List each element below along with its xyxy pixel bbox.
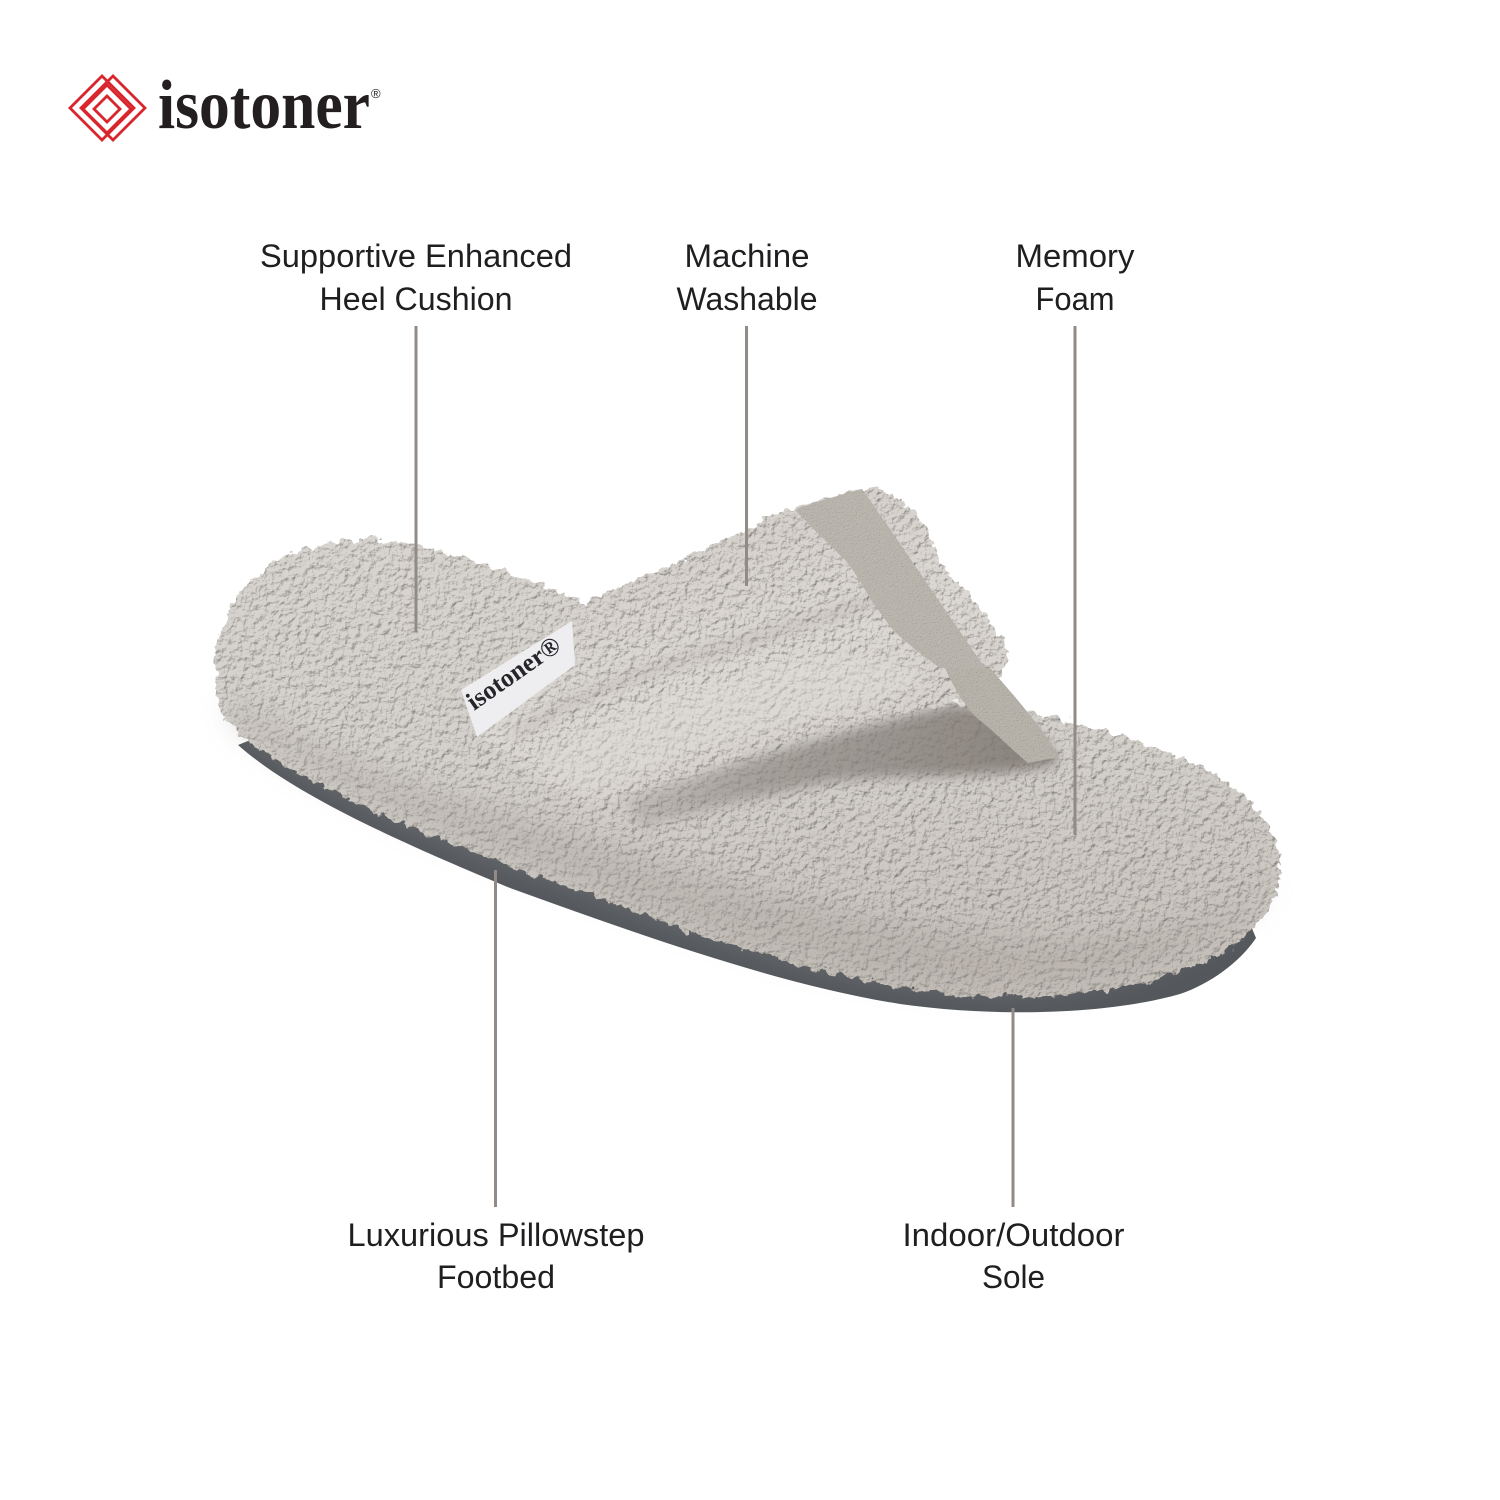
callout: Supportive Enhanced Heel Cushion: Heel Cushion [320, 281, 512, 317]
callout: Indoor/Outdoor Sole: Sole [982, 1259, 1045, 1295]
fabric binding patch [795, 489, 985, 668]
icon: red diamond mark [70, 76, 145, 140]
toe post strap [945, 668, 1059, 763]
callout: Luxurious Pillowstep Footbed: Luxurious Pillowstep [348, 1217, 644, 1253]
registered mark: ® [371, 86, 381, 101]
woven brand tag [461, 621, 575, 737]
callout: Indoor/Outdoor Sole: Indoor/Outdoor [902, 1217, 1125, 1253]
tag text: isotoner® [461, 630, 566, 716]
callout: Memory Foam [1016, 238, 1134, 835]
logo wordmark: isotoner [158, 67, 370, 144]
strap fold highlight [530, 658, 930, 795]
slipper product photo [215, 487, 1280, 1012]
footbed side shading [230, 690, 1278, 990]
logo: isotoner [70, 67, 381, 144]
callout: Supportive Enhanced Heel Cushion [260, 238, 572, 632]
callout: Supportive Enhanced Heel Cushion: Supportive Enhanced [260, 238, 572, 274]
callout: Luxurious Pillowstep Footbed [348, 870, 644, 1295]
callout: Machine Washable: Washable [676, 281, 818, 317]
callout: Memory Foam: Foam [1036, 281, 1114, 317]
strap fold crease [515, 600, 880, 735]
callout: Luxurious Pillowstep Footbed: Footbed [437, 1259, 555, 1295]
shadow under strap [625, 706, 1060, 828]
callout: Indoor/Outdoor Sole [902, 1008, 1125, 1295]
sole [238, 720, 1256, 1012]
callout: Memory Foam: Memory [1016, 238, 1134, 274]
footbed [215, 539, 1280, 997]
callout: Machine Washable: Machine [684, 238, 810, 274]
callout: Machine Washable [676, 238, 818, 586]
terry strap [484, 487, 1008, 808]
